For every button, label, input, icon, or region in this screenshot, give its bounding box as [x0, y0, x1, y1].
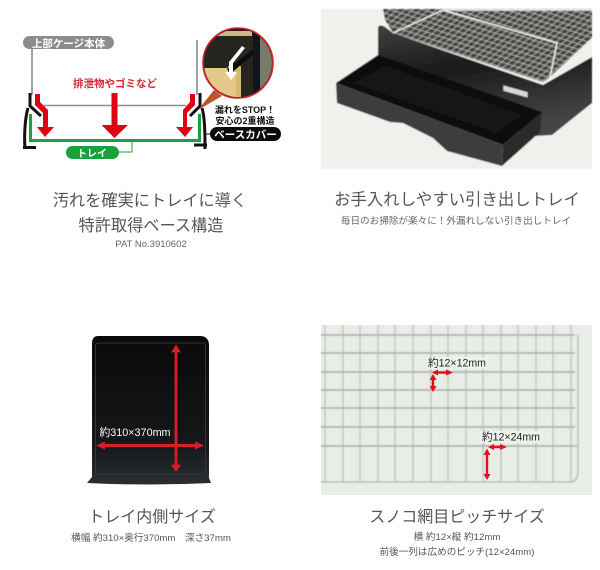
- label: waste and debris: 排泄物やゴミなど: [73, 77, 157, 90]
- label: tray: トレイ: [77, 148, 107, 160]
- heading: base structure: 汚れを確実にトレイに導く: [53, 191, 247, 210]
- base cover profile right: [190, 93, 207, 149]
- dimension: 12 by 12: [426, 356, 488, 392]
- wire cage: [383, 9, 592, 82]
- drawer floor: [352, 66, 522, 133]
- label: upper cage body: [23, 36, 114, 50]
- dimension: tray: 約310×370mm: [99, 425, 171, 439]
- label: tray: [66, 142, 132, 160]
- upper cage body lines: [32, 40, 197, 106]
- photo: pull-out drawer: [321, 9, 592, 169]
- arrow: tray depth: [172, 345, 180, 471]
- subtext: mesh pitch: 横 約12×縦 約12mm: [414, 531, 500, 543]
- heading: base structure: 特許取得ベース構造: [79, 217, 223, 235]
- subtext: mesh pitch: 前後一列は広めのピッチ(12×24mm): [380, 546, 534, 558]
- subtext: mesh pitch: [380, 531, 534, 558]
- label: upper cage body: 上部ケージ本体: [32, 37, 106, 50]
- arrow: left waste: [35, 94, 54, 137]
- label plate: [503, 85, 528, 98]
- arrow: center waste: [102, 93, 128, 138]
- callout: double structure: [215, 104, 275, 126]
- base cover profile left: [23, 93, 41, 149]
- heading: base structure: [53, 191, 247, 235]
- dimension: 12 by 24: [480, 430, 543, 480]
- callout: double structure: 安心の2重構造: [215, 115, 275, 126]
- photo: tray inner size: [87, 336, 211, 484]
- drawer side: [502, 112, 542, 166]
- label: base cover: ベースカバー: [214, 129, 277, 141]
- drawer inside: [336, 55, 542, 145]
- dimension: 12 by 12: 約12×12mm: [428, 356, 486, 370]
- cage frame wires: [393, 10, 592, 77]
- heading: mesh pitch: スノコ網目ピッチサイズ: [369, 508, 545, 526]
- wire grid: [321, 325, 578, 482]
- cage base: [378, 26, 592, 136]
- subtext: tray inner size: 横幅 約310×奥行370mm 深さ37mm: [71, 532, 231, 544]
- drawer front: [336, 83, 503, 166]
- arrow: right waste: [176, 94, 195, 137]
- diagram: patented base structure: [23, 28, 281, 160]
- arrow: tray width: [96, 442, 204, 450]
- patent number: PAT No.3910602: [115, 239, 187, 250]
- green tray: [30, 114, 200, 140]
- subtext: drawer tray: 毎日のお掃除が楽々に！外漏れしない引き出しトレイ: [341, 215, 571, 227]
- label: base cover: [204, 127, 281, 141]
- heading: tray inner size: トレイ内側サイズ: [88, 508, 216, 526]
- icon: leak arrow: [225, 46, 245, 80]
- magnifier callout: [198, 28, 274, 110]
- callout: double structure: 漏れをSTOP！: [215, 104, 275, 115]
- heading: drawer tray: お手入れしやすい引き出しトレイ: [334, 191, 580, 209]
- dimension: 12 by 24: 約12×24mm: [482, 430, 540, 444]
- photo: wire mesh: [321, 325, 592, 495]
